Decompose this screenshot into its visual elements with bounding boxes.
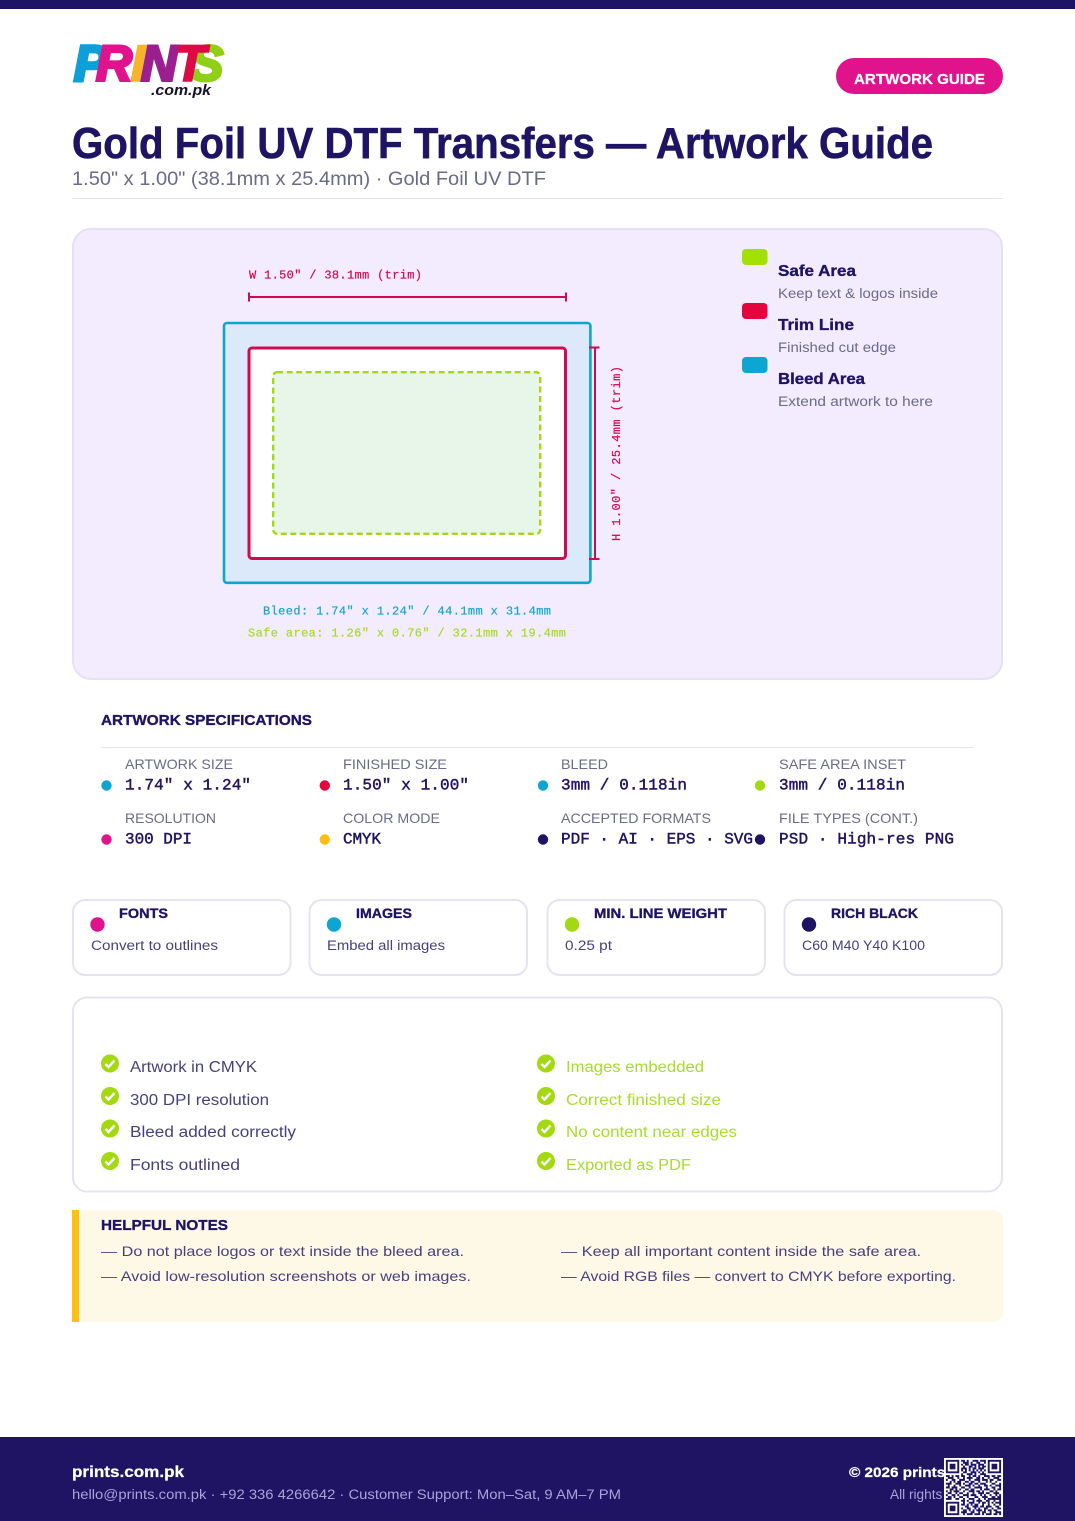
note lines: — Avoid low-resolution screenshots or web images. bbox=[101, 1268, 471, 1284]
card: min. line weight: MIN. LINE WEIGHT bbox=[594, 905, 727, 921]
legend: safe area: Keep text & logos inside bbox=[778, 286, 938, 301]
subtitle: 1.50" x 1.00" (38.1mm x 25.4mm) · Gold Foil UV DTF bbox=[72, 169, 546, 190]
logo: I bbox=[131, 36, 146, 92]
footer bbox=[0, 1437, 1075, 1521]
spec: finished size bbox=[320, 756, 469, 794]
footer copyright: © 2026 prints.com.pk bbox=[849, 1465, 1004, 1480]
legend: bleed area: Extend artwork to here bbox=[778, 394, 933, 409]
legend: trim line: Finished cut edge bbox=[778, 340, 896, 355]
check item: fonts outlined bbox=[101, 1152, 240, 1174]
spec: artwork size: 1.74" x 1.24" bbox=[125, 776, 251, 794]
spec: safe area inset: 3mm / 0.118in bbox=[779, 776, 905, 794]
width dimension arrow bbox=[249, 292, 566, 302]
footer brand: prints.com.pk bbox=[72, 1464, 184, 1481]
spec: resolution bbox=[101, 810, 216, 848]
note lines: — Keep all important content inside the safe area. bbox=[561, 1243, 921, 1259]
logo: S bbox=[190, 36, 223, 92]
check item: fonts outlined: Fonts outlined bbox=[130, 1157, 240, 1174]
check item: exported as PDF: Exported as PDF bbox=[566, 1157, 691, 1174]
logo: N bbox=[141, 36, 178, 92]
panel: checklist bbox=[73, 998, 1002, 1192]
logo: P bbox=[74, 36, 108, 92]
spec: resolution: 300 DPI bbox=[125, 830, 192, 848]
note lines bbox=[101, 1243, 956, 1284]
card: min. line weight: 0.25 pt bbox=[565, 938, 612, 953]
logo: T bbox=[175, 36, 210, 92]
check item: 300 DPI bbox=[101, 1087, 269, 1109]
logo: R bbox=[96, 36, 132, 92]
spec: color mode bbox=[320, 810, 440, 848]
card: min. line weight bbox=[548, 900, 765, 975]
notes heading: HELPFUL NOTES bbox=[101, 1217, 228, 1234]
spec: bleed: 3mm / 0.118in bbox=[561, 776, 687, 794]
spec: bleed: BLEED bbox=[561, 756, 608, 772]
logo bbox=[74, 36, 223, 99]
spec: finished size: 1.50" x 1.00" bbox=[343, 776, 469, 794]
card: fonts bbox=[73, 900, 290, 975]
spec: safe area inset: SAFE AREA INSET bbox=[779, 756, 906, 772]
badge: artwork guide: ARTWORK GUIDE bbox=[854, 72, 985, 88]
card: rich black: C60 M40 Y40 K100 bbox=[802, 938, 925, 953]
check item: correct size bbox=[537, 1087, 721, 1109]
top bar bbox=[0, 0, 1075, 9]
legend: trim line: Trim Line bbox=[778, 317, 854, 334]
check item: bleed added: Bleed added correctly bbox=[130, 1124, 296, 1141]
width dimension label: W 1.50" / 38.1mm (trim) bbox=[249, 268, 422, 282]
spec: artwork size: ARTWORK SIZE bbox=[125, 756, 233, 772]
specifications heading: ARTWORK SPECIFICATIONS bbox=[101, 712, 312, 729]
card: fonts: FONTS bbox=[119, 905, 168, 921]
spec: resolution: RESOLUTION bbox=[125, 810, 216, 826]
check item: images embedded: Images embedded bbox=[566, 1059, 704, 1076]
spec: artwork size bbox=[101, 756, 251, 794]
note lines: — Avoid RGB files — convert to CMYK before exporting. bbox=[561, 1268, 956, 1284]
panel: artwork specifications bbox=[101, 712, 974, 848]
check item: no content near edges: No content near edges bbox=[566, 1124, 737, 1141]
panel: artwork diagram bbox=[73, 229, 1002, 679]
QR code bbox=[944, 1458, 1003, 1517]
safe dimensions: Safe area: 1.26" x 0.76" / 32.1mm x 19.4mm bbox=[248, 626, 566, 640]
footer contact: hello@prints.com.pk · +92 336 4266642 · Customer Support: Mon–Sat, 9 AM–7 PM bbox=[72, 1487, 621, 1502]
note lines: — Do not place logos or text inside the bleed area. bbox=[101, 1243, 464, 1259]
legend: trim line bbox=[742, 303, 896, 355]
spec: file types: FILE TYPES (CONT.) bbox=[779, 810, 918, 826]
check item: exported as PDF bbox=[537, 1152, 691, 1174]
card: rich black: RICH BLACK bbox=[831, 905, 918, 921]
spec: safe area inset bbox=[755, 756, 906, 794]
logo: .com.pk bbox=[151, 83, 212, 99]
card: rich black bbox=[784, 900, 1002, 975]
footer rights: All rights reserved. bbox=[890, 1487, 1003, 1502]
check item: 300 DPI: 300 DPI resolution bbox=[130, 1092, 269, 1109]
legend: bleed area: Bleed Area bbox=[778, 371, 865, 388]
panel: helpful notes bbox=[72, 1210, 1003, 1322]
legend: bleed area bbox=[742, 357, 933, 409]
spec: file types bbox=[755, 810, 954, 848]
spec: accepted formats bbox=[538, 810, 753, 848]
spec: file types: PSD · High-res PNG bbox=[779, 830, 954, 848]
spec: color mode: CMYK bbox=[343, 830, 381, 848]
badge: artwork guide bbox=[836, 58, 1003, 94]
check item: artwork in CMYK: Artwork in CMYK bbox=[130, 1059, 258, 1076]
height dimension label: H 1.00" / 25.4mm (trim) bbox=[610, 366, 624, 541]
check item: correct size: Correct finished size bbox=[566, 1092, 721, 1109]
card: fonts: Convert to outlines bbox=[91, 938, 218, 953]
bleed area bbox=[224, 323, 590, 583]
spec: finished size: FINISHED SIZE bbox=[343, 756, 447, 772]
legend: safe area: Safe Area bbox=[778, 263, 856, 280]
spec: bleed bbox=[538, 756, 687, 794]
spec: color mode: COLOR MODE bbox=[343, 810, 440, 826]
spec: accepted formats: ACCEPTED FORMATS bbox=[561, 810, 711, 826]
card: images: IMAGES bbox=[356, 905, 412, 921]
title: Gold Foil UV DTF Transfers — Artwork Guide bbox=[72, 119, 933, 168]
height dimension bracket bbox=[589, 348, 600, 559]
card: images: Embed all images bbox=[327, 938, 445, 953]
check item: artwork in CMYK bbox=[101, 1054, 258, 1076]
safe area bbox=[273, 372, 540, 534]
trim line bbox=[249, 348, 566, 558]
check item: images embedded bbox=[537, 1054, 704, 1076]
check item: bleed added bbox=[101, 1120, 296, 1141]
legend: safe area bbox=[742, 249, 938, 301]
spec: accepted formats: PDF · AI · EPS · SVG bbox=[561, 830, 753, 848]
bleed dimensions: Bleed: 1.74" x 1.24" / 44.1mm x 31.4mm bbox=[263, 604, 551, 618]
check item: no content near edges bbox=[537, 1120, 737, 1141]
card: images bbox=[310, 900, 527, 975]
